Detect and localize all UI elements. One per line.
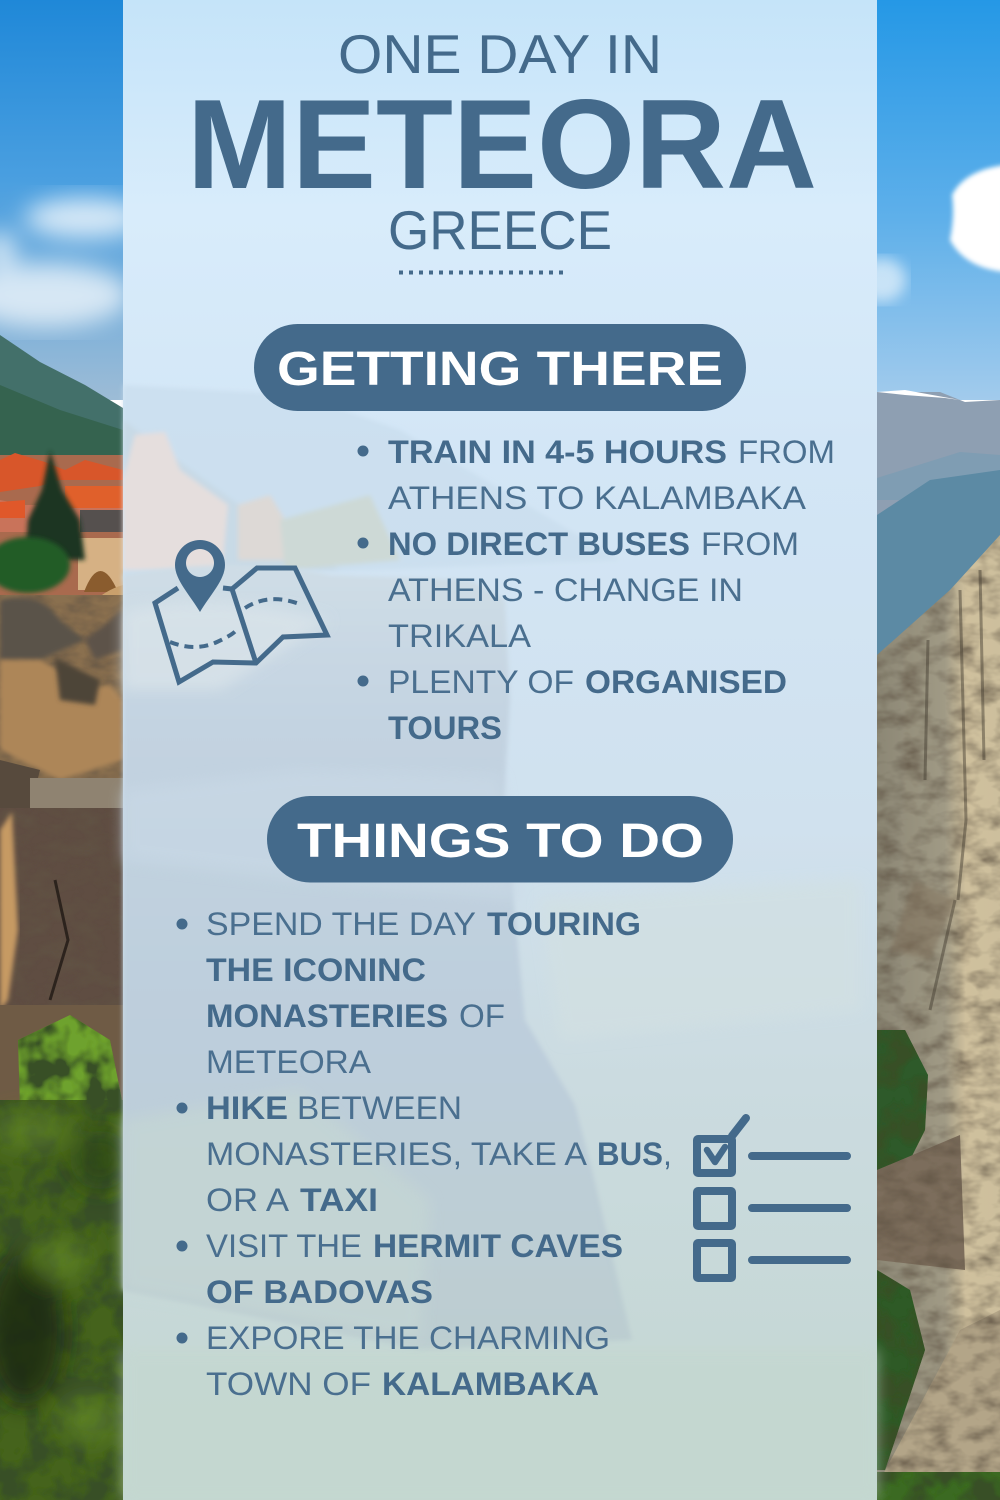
panel: translucent text column over the faded photo (123, 0, 877, 1500)
heading pill: getting there: GETTING THERE (277, 343, 723, 396)
bullet: hike (176, 1090, 672, 1218)
icon: checklist (697, 1118, 847, 1278)
bullet: train (358, 434, 835, 516)
bullet: monasteries (176, 906, 641, 1080)
bullet: buses: FROM (701, 526, 799, 562)
bullet: hike: MONASTERIES, TAKE A (206, 1136, 588, 1172)
bullet: monasteries: MONASTERIES (206, 998, 448, 1034)
bullet: Kalambaka: EXPORE THE CHARMING (206, 1320, 610, 1356)
bullet: hermit caves (176, 1228, 623, 1310)
bullet: tours: PLENTY OF (388, 664, 574, 700)
text block: getting there list (358, 434, 835, 746)
bullet: hike: OR A (206, 1182, 290, 1218)
bullet: hike: BETWEEN (297, 1090, 462, 1126)
bullet: Kalambaka (176, 1320, 610, 1402)
title line: Meteora: METEORA (187, 73, 817, 215)
bullet: hike: HIKE (206, 1090, 288, 1126)
bullet: hike: BUS (597, 1136, 663, 1172)
bullet: tours (358, 664, 787, 746)
bullet: train: ATHENS TO KALAMBAKA (388, 480, 807, 516)
bullet: buses (358, 526, 799, 654)
heading pill: things to do: THINGS TO DO (297, 815, 704, 868)
bullet: tours: TOURS (388, 710, 502, 746)
title line: Greece: GREECE (388, 199, 612, 261)
photo: left side of Meteora cliff with monastery (0, 0, 123, 1500)
bullet: Kalambaka: TOWN OF (206, 1366, 371, 1402)
title line: one day in: ONE DAY IN (338, 23, 662, 85)
heading pill: things to do (267, 796, 733, 882)
bullet: monasteries: OF (459, 998, 505, 1034)
bullet: tours: ORGANISED (585, 664, 787, 700)
bullet: hermit caves: OF BADOVAS (206, 1274, 433, 1310)
text block: things to do list (176, 906, 672, 1402)
bullet: monasteries: METEORA (206, 1044, 372, 1080)
bullet: buses: NO DIRECT BUSES (388, 526, 690, 562)
bullet: Kalambaka: KALAMBAKA (382, 1366, 599, 1402)
bullet: monasteries: THE ICONINC (206, 952, 426, 988)
bullet: buses: ATHENS - CHANGE IN (388, 572, 743, 608)
bullet: monasteries: TOURING (487, 906, 641, 942)
bullet: buses: TRIKALA (388, 618, 532, 654)
bullet: train: FROM (738, 434, 835, 470)
bullet: train: TRAIN IN 4-5 HOURS (388, 434, 727, 470)
bullet: hike: , (663, 1136, 672, 1172)
title (187, 23, 817, 261)
bullet: hike: TAXI (300, 1182, 378, 1218)
heading pill: getting there (254, 324, 746, 411)
bullet: hermit caves: VISIT THE (206, 1228, 362, 1264)
icon: folded map with location pin (155, 540, 327, 682)
photo: right side of Meteora cliff (877, 0, 1000, 1500)
bullet: hermit caves: HERMIT CAVES (373, 1228, 623, 1264)
bullet: monasteries: SPEND THE DAY (206, 906, 476, 942)
